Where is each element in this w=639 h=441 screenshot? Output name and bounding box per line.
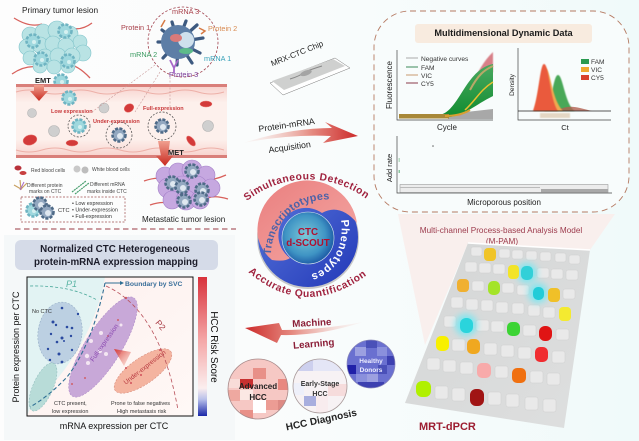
heatmap: early-stage HCC: Early-Stage (301, 381, 339, 388)
text: simultaneous detection: Simultaneous Detection (244, 173, 368, 200)
white blood cells (28, 103, 214, 136)
labels: expression levels (51, 106, 184, 125)
marker labels (121, 7, 237, 79)
x axis title: mRNA expression per CTC (60, 421, 169, 431)
chart: Ct density: Ct (561, 123, 570, 132)
red blood cells (22, 101, 212, 148)
label: EMT: EMT (35, 76, 51, 85)
chart: amplification curves: FAM (421, 65, 435, 72)
section divider (15, 228, 236, 230)
legend: Red blood cells (31, 168, 66, 174)
panel: tumor metastasis and circulation (12, 5, 237, 224)
MRT-dPCR plate (405, 243, 590, 433)
cluster: no CTC (38, 302, 82, 364)
marker labels: mRNA 2 (130, 50, 157, 59)
legend: marks on CTC (29, 189, 62, 195)
colour bar title: HCC Risk Score (208, 311, 219, 383)
legend (14, 166, 130, 195)
MRX-CTC chip (270, 39, 350, 95)
colour bar (198, 277, 207, 416)
labels: expression levels: Low expression (51, 109, 93, 115)
fluorescent wells (416, 248, 571, 406)
heatmap: healthy donors (347, 340, 395, 388)
annotations: low expression (52, 409, 88, 415)
blood vessel (16, 84, 227, 158)
P2 boundary (106, 286, 178, 410)
legend: Different mRNA (90, 182, 126, 188)
arrow: protein-mRNA acquisition: Protein-mRNA (258, 116, 315, 134)
plate wells (427, 247, 580, 412)
annotations: CTC present, (54, 401, 87, 407)
chart: amplification curves: Fluorescence (385, 60, 394, 109)
annotations: No CTC (32, 309, 52, 315)
cluster: CTC present, low expression (28, 362, 58, 412)
chart: amplification curves: Cycle (437, 123, 458, 132)
label: MET: MET (168, 148, 184, 157)
heatmap: advanced HCC: Advanced (239, 382, 277, 391)
annotations: High metastasis risk (117, 409, 166, 415)
central logo: CTC d-SCOUT (257, 180, 359, 289)
blue phenotype ring (258, 187, 358, 287)
heatmap: advanced HCC (228, 359, 288, 420)
metastatic tumor cluster (144, 160, 228, 210)
annotations (32, 309, 170, 415)
heading box: expression mapping (15, 240, 218, 270)
labels: expression levels: Under-expression (93, 119, 140, 125)
cluster: under-expression (114, 348, 172, 394)
legend box: CTC types (21, 197, 125, 222)
boundary by SVC line (30, 283, 105, 407)
chart: add rate: Microporous position (467, 198, 541, 207)
core text: CTC (298, 227, 318, 238)
label: HCC diagnosis: HCC Diagnosis (285, 408, 358, 433)
heatmap: advanced HCC: HCC (249, 393, 267, 402)
panel: multidimensional dynamic data (374, 11, 629, 212)
marker labels: Protein 3 (169, 70, 198, 79)
central logo: CTC d-SCOUT: d-SCOUT (286, 238, 330, 249)
text: accurate quantification: Accurate Quantification (248, 268, 366, 299)
heading: metastatic tumor lesion: Metastatic tumor lesion (142, 215, 225, 224)
plate label: MRT-dPCR (419, 421, 476, 433)
arrow: machine learning: Machine (292, 317, 332, 330)
P1 boundary (30, 286, 97, 300)
cluster: full-expression: Full-expression (89, 323, 120, 363)
primary tumor cluster (12, 18, 92, 78)
CTC zoom guide lines (92, 65, 170, 112)
y axis title: Protein expression per CTC (11, 291, 21, 403)
cluster: under-expression: Under-expression (123, 349, 168, 386)
marker labels: Protein 2 (208, 24, 237, 33)
chart: amplification curves: CY5 (421, 81, 434, 88)
legend: Different protein (27, 183, 63, 189)
chart: Ct density (509, 48, 611, 132)
legend: White blood cells (92, 167, 130, 173)
chip label: MRX-CTC Chip (270, 39, 325, 68)
scatter map (11, 277, 219, 431)
chart: amplification curves: Negative curves (421, 56, 469, 63)
arrow: machine learning (245, 317, 363, 352)
heatmap: healthy donors: Healthy (359, 358, 383, 365)
arrow: full to under (114, 349, 131, 366)
legend: marks inside CTC (87, 189, 127, 195)
heatmap: healthy donors: Donors (360, 367, 383, 374)
chart: Ct density: FAM (591, 59, 605, 66)
chart: add rate (385, 136, 612, 207)
SVC region (27, 277, 105, 416)
chart: Ct density: VIC (591, 67, 602, 74)
chart: add rate: Add rate (385, 154, 394, 182)
chart: Ct density: Density (509, 73, 516, 96)
label: boundary by SVC: Boundary by SVC (125, 281, 182, 288)
cluster: full-expression (68, 296, 138, 398)
marker labels: mRNA 3 (172, 7, 199, 16)
arrow: EMT (30, 85, 48, 101)
chart: amplification curves: VIC (421, 73, 432, 80)
label: P1: P1 (66, 279, 77, 289)
arrow: MET (156, 141, 173, 166)
pink transcriptotype ring (257, 180, 357, 261)
legend box: CTC types: • Under-expression (72, 208, 118, 214)
label: P2: P2 (153, 318, 168, 332)
legend box: CTC types: CTC (58, 208, 70, 214)
detached CTC (54, 74, 68, 88)
text: multi-channel model: (M-PAM) (486, 237, 518, 246)
heading box: Multidimensional Dynamic Data (434, 28, 574, 38)
arrow: machine learning: Learning (293, 337, 335, 352)
vessel CTCs (62, 92, 176, 148)
marker labels: mRNA 1 (204, 54, 231, 63)
heading box: expression mapping: protein-mRNA expression mapping (34, 257, 198, 268)
label: phenotypes: Phenotypes (312, 220, 350, 280)
inner core (282, 212, 334, 264)
legend box: CTC types: • Low expression (72, 201, 113, 207)
enlarged CTC with markers (148, 7, 218, 77)
arrow: protein-mRNA acquisition: Acquisition (268, 139, 311, 155)
heading box (415, 24, 592, 43)
chart: amplification curves (385, 50, 493, 132)
funnel to M-PAM model (398, 214, 615, 345)
heading box: expression mapping: Normalized CTC Heterogeneous (40, 244, 190, 255)
annotations: Prone to false negatives (111, 401, 170, 407)
text: multi-channel model: Multi-channel Process-based Analysis Model (420, 226, 582, 235)
label: transcriptotypes: Transcriptotypes (264, 194, 329, 254)
text: multi-channel model (420, 226, 582, 246)
heading: primary tumor lesion: Primary tumor lesion (22, 5, 98, 15)
chart: Ct density: CY5 (591, 75, 604, 82)
legend box: CTC types: • Full-expression (72, 214, 112, 220)
heatmap: early-stage HCC (293, 359, 347, 413)
marker labels: Protein 1 (121, 23, 150, 32)
labels: expression levels: Full-expression (143, 106, 184, 112)
heatmap: early-stage HCC: HCC (312, 391, 328, 398)
arrow: protein-mRNA acquisition (243, 116, 358, 155)
